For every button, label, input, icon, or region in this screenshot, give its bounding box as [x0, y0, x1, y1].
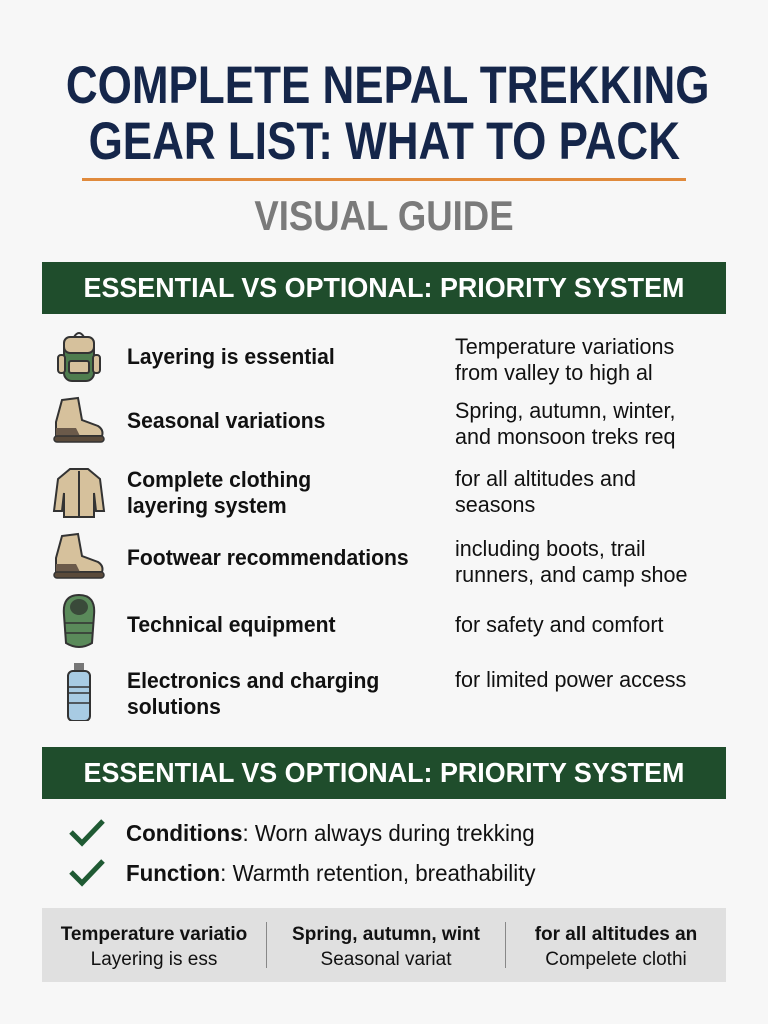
column 3 [535, 924, 697, 970]
label: electronics: Electronics and charging [127, 668, 379, 693]
title: COMPLETE NEPAL TREKKING [66, 56, 710, 115]
label: seasonal: Seasonal variations [127, 408, 325, 433]
subtitle: VISUAL GUIDE [254, 192, 514, 239]
column 3: for all altitudes an [535, 924, 697, 945]
desc: runners, and camp shoe [455, 562, 688, 587]
label: technical: Technical equipment [127, 612, 336, 637]
desc: Spring, autumn, winter, [455, 398, 676, 423]
checklist [69, 819, 536, 887]
icon: boot 2 [53, 532, 105, 579]
summary table [42, 908, 726, 982]
icon: jacket [52, 468, 106, 518]
label: footwear: Footwear recommendations [127, 545, 409, 570]
banner: priority system 1: ESSENTIAL VS OPTIONAL: PRIORITY SYSTEM [84, 272, 684, 303]
label: electronics [127, 668, 379, 719]
desc: Temperature variations [455, 334, 674, 359]
icon: water bottle [67, 663, 91, 721]
desc: and monsoon treks req [455, 424, 676, 449]
column 1 [60, 924, 247, 970]
icon: backpack [57, 332, 101, 382]
desc [455, 398, 676, 449]
label: electronics: solutions [127, 694, 221, 719]
column 2 [292, 924, 480, 970]
label: clothing: Complete clothing [127, 467, 311, 492]
desc: for safety and comfort [455, 612, 664, 637]
desc: including boots, trail [455, 536, 646, 561]
desc: seasons [455, 492, 535, 517]
desc: for limited power access [455, 667, 686, 692]
desc [455, 536, 688, 587]
banner: priority system 2: ESSENTIAL VS OPTIONAL: PRIORITY SYSTEM [84, 757, 684, 788]
column 2: Seasonal variat [321, 949, 451, 970]
icon: sleeping bag [62, 594, 96, 648]
column 1: Layering is ess [91, 949, 217, 970]
label: layering: Layering is essential [127, 344, 335, 369]
icon: boot [53, 396, 105, 443]
check: conditions: Conditions: Worn always during trekking [126, 820, 535, 846]
label: clothing: layering system [127, 493, 287, 518]
column 3: Compelete clothi [545, 949, 687, 970]
title [66, 56, 710, 171]
desc [455, 334, 674, 385]
check: function: Function: Warmth retention, breathability [126, 860, 536, 886]
column 1: Temperature variatio [61, 924, 247, 945]
desc: from valley to high al [455, 360, 653, 385]
banner: priority system 1 [42, 262, 726, 314]
desc [455, 466, 636, 517]
banner: priority system 2 [42, 747, 726, 799]
column 2: Spring, autumn, wint [292, 924, 480, 945]
title: GEAR LIST: WHAT TO PACK [88, 112, 680, 171]
desc: for all altitudes and [455, 466, 636, 491]
label: clothing [127, 467, 311, 518]
